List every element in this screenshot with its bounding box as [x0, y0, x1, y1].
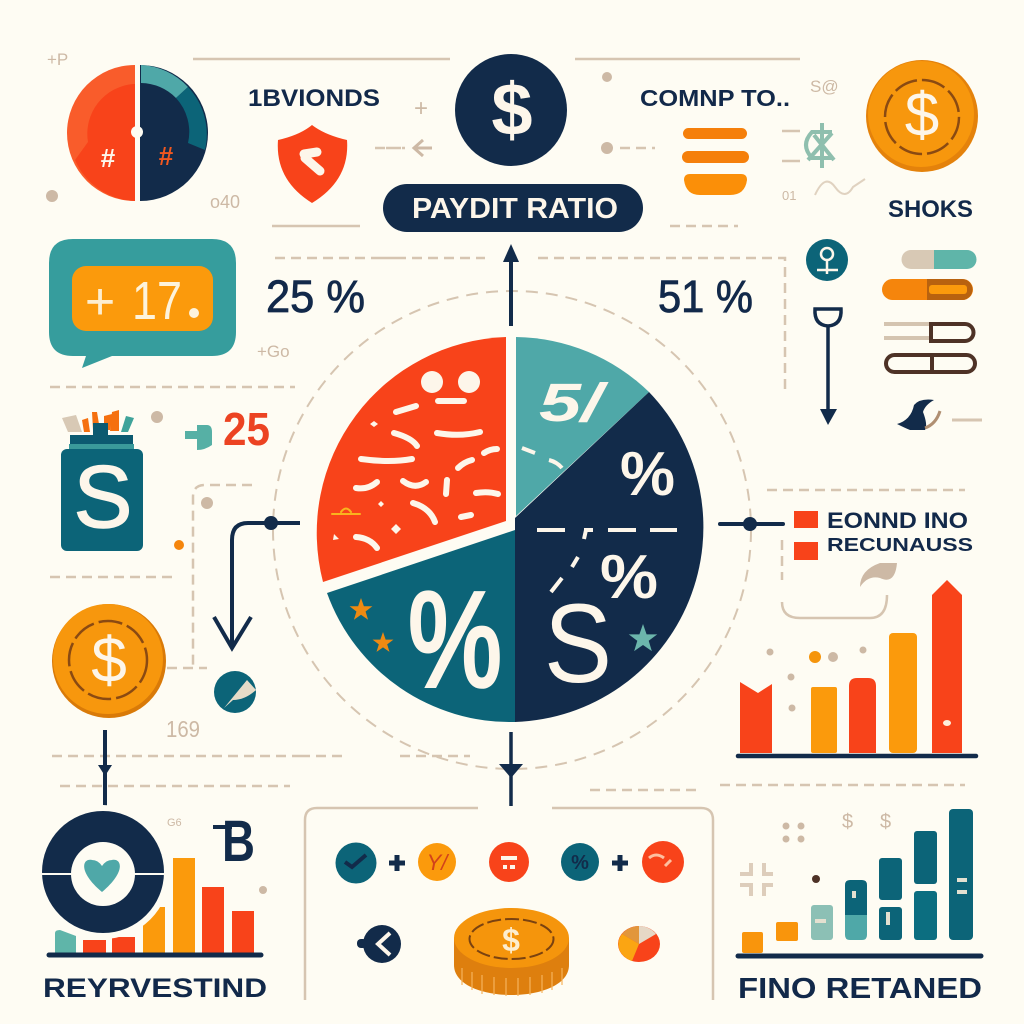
- decorative tan glyphs: +Go: [257, 342, 290, 361]
- panel: center bottom icons: [336, 841, 684, 884]
- small plus icon: [185, 425, 212, 450]
- text: 51 percent: 51 %: [658, 271, 753, 322]
- plus: [612, 855, 628, 871]
- panel: center bottom frame: [305, 808, 713, 1000]
- bar chart: bottom left: [49, 858, 261, 955]
- icon: thin dollar sign: [806, 123, 834, 168]
- icon: check: [336, 842, 376, 884]
- text: reinvesting: REYRVESTIND: [43, 973, 267, 1003]
- main pie chart: [317, 337, 703, 722]
- bar chart: bottom right: [738, 809, 981, 956]
- text: shocks: SHOKS: [888, 196, 973, 223]
- stacked orange bars: [682, 128, 749, 195]
- text: red 25: 25: [223, 403, 270, 455]
- connector: right: [720, 517, 783, 531]
- speech bubble with value: +: [85, 273, 115, 331]
- icon: teal dot: [561, 843, 599, 881]
- arrow: left connector: [214, 516, 300, 648]
- pie slice: blue teal: [327, 530, 515, 722]
- arrow: down right: [815, 309, 841, 425]
- icon: red shield: [278, 125, 347, 203]
- arrow: coin to target: [98, 730, 112, 812]
- pie slice: navy: [515, 392, 703, 722]
- legend: EONND INO: [827, 508, 968, 533]
- decorative tan glyphs: o40: [210, 192, 240, 212]
- speech bubble with value: [49, 239, 236, 368]
- icon: top dollar coin: [455, 54, 567, 166]
- icon: big gold coin stack: [454, 908, 569, 996]
- text: find retained: FINO RETANED: [738, 973, 982, 1005]
- title pill: PAYDIT RATIO: [412, 193, 618, 225]
- arrow: down bottom center: [499, 732, 523, 806]
- top-left half gauge: #: [159, 141, 174, 171]
- decorative tan glyphs: $: [880, 811, 891, 833]
- decorative tan glyphs: G6: [167, 817, 182, 829]
- decorative tan glyphs: [46, 50, 897, 894]
- small globe icon: [214, 671, 256, 713]
- icon: orange circle: [418, 843, 456, 881]
- plus: [389, 855, 405, 871]
- small teal icon: [806, 239, 848, 281]
- orange dot: [174, 540, 184, 550]
- icon: orange coin left: [52, 604, 166, 718]
- decorative tan glyphs: $: [842, 811, 853, 833]
- decorative tan glyphs: 01: [782, 188, 796, 203]
- icon: B currency: B: [222, 809, 255, 874]
- icon: orange coin left: $: [91, 624, 127, 696]
- icon: hash mark: [740, 863, 773, 896]
- icon: red dot 2: [642, 841, 684, 883]
- top-left half gauge: [67, 65, 208, 201]
- icon: top dollar coin: $: [491, 68, 533, 151]
- legend: [794, 508, 973, 560]
- decorative tan glyphs: +: [414, 95, 428, 122]
- star markers: [350, 598, 393, 652]
- top right coin: $: [905, 81, 939, 150]
- text: dividends: 1BVIONDS: [248, 85, 380, 112]
- wavy mark: [815, 179, 865, 195]
- arrow: left small: [414, 140, 432, 156]
- bar chart: right upper: [738, 580, 976, 756]
- text: 25 percent: 25 %: [266, 271, 365, 322]
- title pill: [383, 184, 643, 232]
- top right coin: [866, 60, 978, 172]
- pie slice: red: [317, 337, 506, 582]
- navy slice dollar S: S: [544, 581, 612, 706]
- text: 169: 169: [166, 716, 200, 742]
- pie slice: teal: [516, 337, 649, 516]
- arrow: up from pie: [503, 244, 519, 326]
- decorative tan glyphs: +P: [47, 50, 68, 69]
- teal slice label: 5/: [539, 373, 609, 433]
- text: comparing: COMNP TO..: [640, 85, 790, 111]
- icon: B currency: [213, 809, 255, 874]
- icon: back arrow circle: [357, 925, 401, 963]
- navy slice percent: %: [620, 440, 675, 509]
- target icon: [36, 805, 170, 939]
- icon: small pie: [618, 926, 660, 962]
- teal star: [629, 624, 657, 651]
- decorative tan glyphs: S@: [810, 77, 839, 96]
- icon: red dot: [489, 842, 529, 882]
- navy slice percent small: %: [600, 543, 658, 612]
- panel: center bottom icons: %: [571, 852, 589, 874]
- navy slice dashes: [537, 530, 677, 592]
- blue slice percent: %: [408, 564, 502, 715]
- icon: dollar jar: S: [74, 447, 132, 546]
- legend: RECUNAUSS: [827, 535, 973, 555]
- red slice marks: [332, 371, 498, 548]
- top-left half gauge: #: [101, 143, 116, 173]
- icon: dollar jar: [61, 410, 143, 551]
- speech bubble with value: 17: [132, 271, 182, 331]
- right stacked pills: [882, 250, 982, 430]
- icon: big gold coin stack: $: [502, 922, 520, 958]
- teal slice dashes: [522, 448, 562, 468]
- panel: center bottom icons: Y/: [427, 850, 449, 875]
